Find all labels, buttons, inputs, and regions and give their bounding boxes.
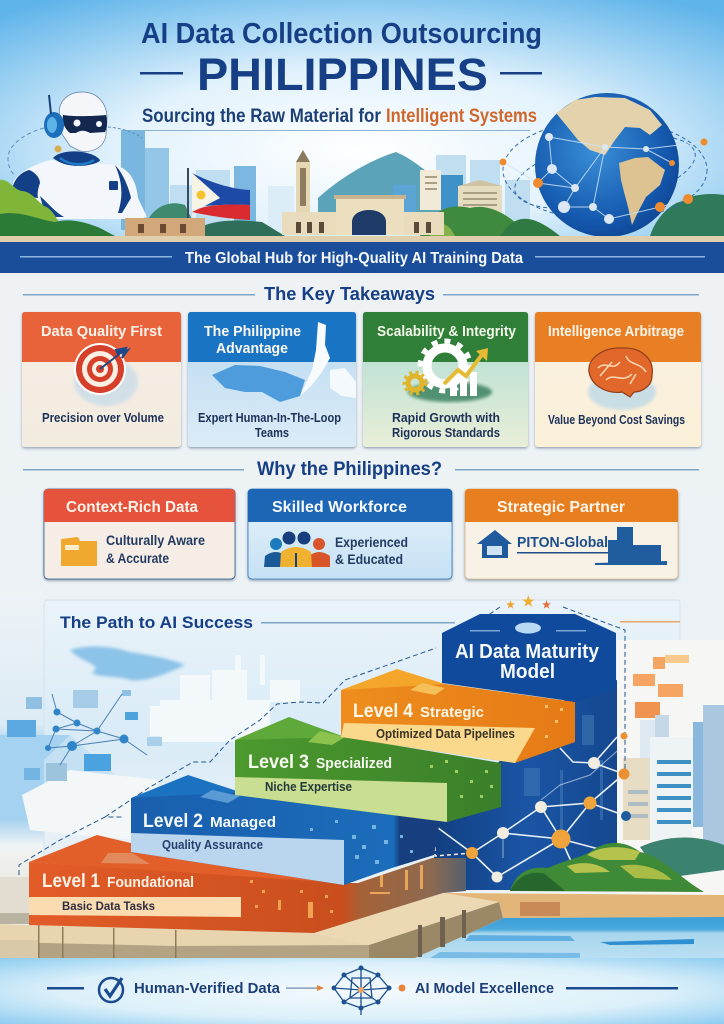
icon: orange dot — [398, 984, 406, 992]
icon: office buildings — [595, 527, 667, 565]
step: Level 3 Specialized — [235, 717, 501, 822]
tree: left foliage — [0, 180, 115, 236]
icon: target — [74, 343, 138, 406]
panel: The Path to AI Success — [44, 600, 680, 900]
icon: Philippine flag — [187, 168, 250, 236]
panel: Strategic Partner: Strategic Partner — [497, 499, 625, 516]
panel: The Philippine Advantage: Advantage — [216, 340, 288, 357]
step: Level 4 Strategic: Strategic — [420, 705, 484, 721]
step: Level 4 Strategic: Level 4 — [353, 701, 413, 722]
subtitle: Sourcing the Raw Material for — [142, 106, 382, 127]
title: PHILIPPINES — [197, 49, 488, 100]
icon: globe — [500, 93, 708, 237]
panel: The Philippine Advantage: Expert Human-In-The-Loop — [198, 410, 341, 425]
icon: neural network tree — [332, 966, 392, 1015]
icon: house — [477, 530, 512, 558]
water — [415, 917, 724, 958]
icon: map of the Philippines — [212, 322, 356, 402]
icon: check — [99, 978, 123, 1002]
banner: The Global Hub for High-Quality AI Training Data — [185, 250, 523, 267]
panel: Data Quality First: Precision over Volume — [42, 410, 164, 425]
panel: Intelligence Arbitrage: Intelligence Arbitrage — [548, 323, 684, 340]
AI Data Maturity Model block: Model — [500, 661, 555, 683]
building: heritage hall — [125, 150, 444, 236]
step: Level 4 Strategic — [341, 669, 575, 763]
upper ledge — [443, 893, 724, 918]
panel: Skilled Workforce: & Educated — [335, 552, 403, 567]
dashed line right of head — [108, 127, 142, 138]
footer — [0, 958, 724, 1024]
panel: Context-Rich Data: Culturally Aware — [106, 533, 205, 548]
tower: network behind steps — [434, 680, 631, 890]
icon: data grid — [515, 622, 541, 634]
panel: Scalability & Integrity: Rigorous Standards — [392, 425, 500, 440]
skyline background — [121, 130, 530, 230]
heading: The Key Takeaways: The Key Takeaways — [264, 283, 435, 304]
step: Level 1 Foundational: Level 1 — [42, 871, 100, 892]
trees — [143, 194, 724, 236]
step: Level 3 Specialized: Level 3 — [248, 752, 309, 773]
city buildings — [393, 170, 502, 220]
dashed path line — [19, 607, 625, 907]
panel: Intelligence Arbitrage — [535, 312, 701, 447]
footer: AI Model Excellence — [415, 980, 554, 997]
icon: stars: ★ — [506, 600, 515, 611]
icon: folder — [61, 537, 97, 566]
panel: The Philippine Advantage: Teams — [255, 425, 289, 440]
step: Level 2 Managed: Level 2 — [143, 811, 203, 832]
step: Level 1 Foundational — [29, 835, 466, 933]
step: Level 4 Strategic: Optimized Data Pipelines — [376, 727, 515, 741]
icon: stars — [506, 593, 551, 611]
step: Level 2 Managed: Managed — [210, 814, 276, 831]
panel: Scalability & Integrity — [363, 312, 528, 447]
step: Level 1 Foundational: Basic Data Tasks — [62, 899, 155, 913]
panel: Context-Rich Data: Context-Rich Data — [66, 499, 198, 516]
icon: robot — [12, 92, 147, 219]
panel: Scalability & Integrity: Rapid Growth with — [392, 410, 500, 425]
panel: Data Quality First: Data Quality First — [41, 323, 162, 340]
ground strip — [0, 236, 724, 242]
panel: The Philippine Advantage: The Philippine — [204, 323, 301, 340]
icon: brain — [588, 348, 656, 410]
panel: Skilled Workforce: Experienced — [335, 535, 408, 550]
AI Data Maturity Model block: AI Data Maturity — [455, 641, 600, 663]
icon: stars: ★ — [522, 593, 535, 609]
arrow: data to model — [286, 985, 324, 991]
icon: team — [264, 532, 330, 567]
panel: The Philippine Advantage — [188, 312, 356, 447]
step: Level 1 Foundational: Foundational — [107, 875, 194, 891]
panel: Intelligence Arbitrage: Value Beyond Cost Savings — [548, 412, 685, 427]
panel: Scalability & Integrity: Scalability & Integrity — [377, 323, 517, 340]
step: Level 2 Managed — [131, 775, 440, 885]
left backdrop — [0, 590, 44, 910]
heading: Why the Philippines?: Why the Philippines? — [257, 458, 442, 480]
title: AI Data Collection Outsourcing — [141, 18, 542, 50]
panel: Context-Rich Data — [44, 489, 235, 579]
panel: Data Quality First — [22, 312, 181, 447]
network — [434, 737, 626, 877]
city background left and right — [0, 640, 724, 895]
panel: Strategic Partner: PITON-Global — [517, 534, 608, 551]
step: Level 3 Specialized: Specialized — [316, 756, 392, 772]
banner — [0, 242, 724, 273]
bushes — [510, 837, 724, 892]
title — [140, 18, 542, 100]
panel: Context-Rich Data: & Accurate — [106, 551, 169, 566]
mountain — [318, 152, 470, 230]
subtitle — [142, 106, 537, 131]
step: Level 2 Managed: Quality Assurance — [162, 838, 263, 852]
orbit rings — [503, 120, 707, 222]
header scene — [0, 0, 724, 242]
stone walkway and water — [0, 877, 724, 958]
panel: Strategic Partner — [465, 489, 678, 579]
heading: path: The Path to AI Success — [60, 613, 253, 632]
AI Data Maturity Model block — [442, 614, 616, 702]
panel: Skilled Workforce — [248, 489, 452, 579]
panel: Skilled Workforce: Skilled Workforce — [272, 499, 407, 516]
stone front — [0, 924, 369, 958]
footer: Human-Verified Data — [134, 980, 281, 997]
icon: stars: ★ — [542, 600, 551, 611]
stone face right — [369, 902, 503, 958]
subtitle: Intelligent Systems — [386, 106, 537, 127]
orbit line left — [8, 128, 44, 175]
icon: gears and growth arrow — [404, 341, 492, 402]
step: Level 3 Specialized: Niche Expertise — [265, 780, 352, 794]
